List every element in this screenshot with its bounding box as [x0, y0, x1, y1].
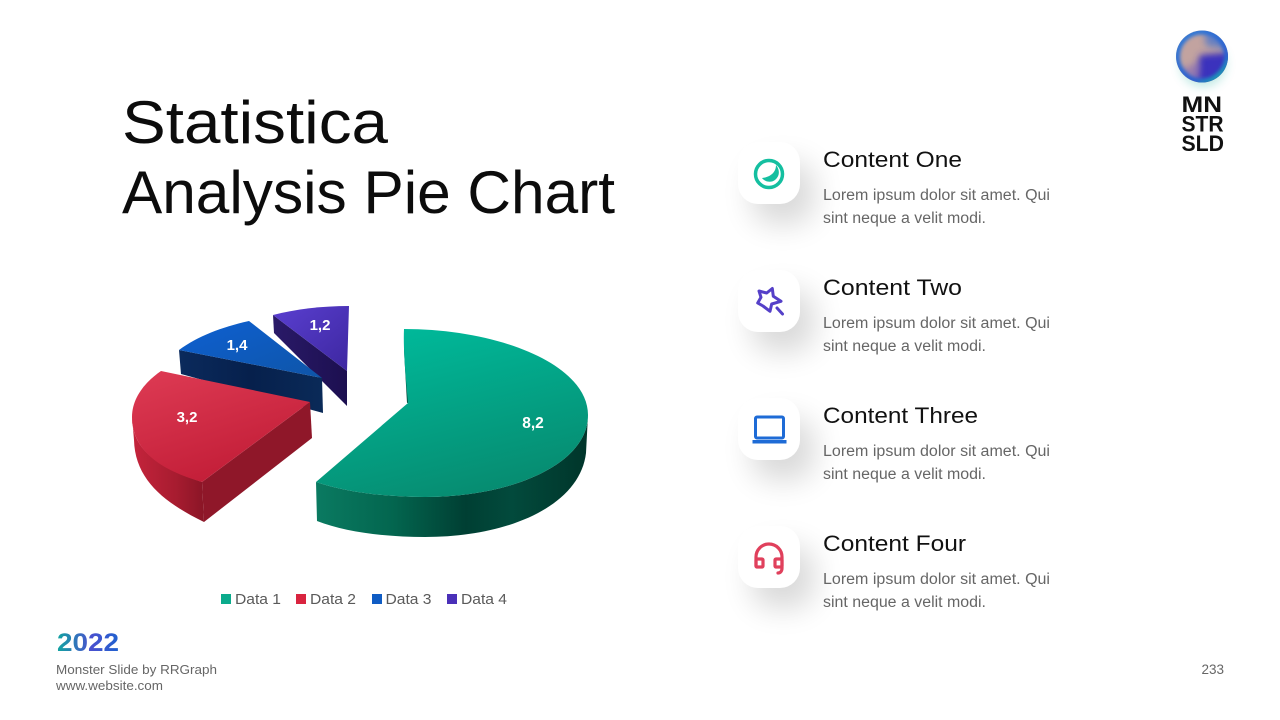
slice: Data 4 purple 1,2	[273, 306, 349, 406]
title: Statistica	[122, 89, 389, 156]
logo text: STR	[1182, 112, 1224, 136]
item: Content One	[738, 142, 1050, 227]
title: Analysis Pie Chart	[122, 159, 615, 226]
3D pie chart	[132, 306, 588, 537]
logo text: MN	[1182, 92, 1222, 117]
legend: Data 1	[235, 591, 281, 608]
slice: Data 1 green 8,2	[316, 329, 588, 537]
text one	[823, 147, 1050, 227]
slice: Data 4 purple 1,2: 1,2	[310, 317, 330, 334]
slice: Data 3 blue 1,4: 1,4	[227, 337, 248, 354]
text three: sint neque a velit modi.	[823, 466, 986, 483]
text four	[823, 531, 1050, 611]
footer year: 2022	[57, 629, 119, 657]
text three: Content Three	[823, 403, 978, 428]
text one: Content One	[823, 147, 962, 172]
text four: Lorem ipsum dolor sit amet. Qui	[823, 571, 1050, 588]
legend: Data 3	[386, 591, 432, 608]
footer credits: www.website.com	[55, 678, 163, 693]
text two: Content Two	[823, 275, 962, 300]
icon card two	[738, 270, 814, 352]
legend	[221, 591, 507, 608]
footer credits: Monster Slide by RRGraph	[56, 662, 217, 677]
text three	[823, 403, 1050, 483]
icon card four	[738, 526, 814, 608]
slice: Data 2 red 3,2: 3,2	[177, 409, 197, 426]
logo	[1175, 30, 1231, 151]
icon card one	[738, 142, 814, 224]
item: Content Two	[738, 270, 1050, 355]
slice: Data 2 red 3,2	[132, 371, 312, 522]
title	[122, 89, 615, 226]
text four: Content Four	[823, 531, 966, 556]
slice: Data 3 blue 1,4	[179, 321, 323, 413]
text two: Lorem ipsum dolor sit amet. Qui	[823, 315, 1050, 332]
item: Content Three	[738, 398, 1050, 483]
logo orb	[1175, 30, 1231, 92]
text three: Lorem ipsum dolor sit amet. Qui	[823, 443, 1050, 460]
text one: Lorem ipsum dolor sit amet. Qui	[823, 187, 1050, 204]
item: Content Four	[738, 526, 1050, 611]
logo text: SLD	[1182, 131, 1224, 156]
page number: 233	[1201, 662, 1224, 677]
legend: Data 4	[461, 591, 507, 608]
text one: sint neque a velit modi.	[823, 210, 986, 227]
text two: sint neque a velit modi.	[823, 338, 986, 355]
text four: sint neque a velit modi.	[823, 594, 986, 611]
legend: Data 2	[310, 591, 356, 608]
footer credits	[55, 662, 217, 693]
text two	[823, 275, 1050, 355]
logo text	[1182, 92, 1224, 156]
icon card three	[738, 398, 814, 480]
slice: Data 1 green 8,2: 8,2	[522, 415, 544, 432]
